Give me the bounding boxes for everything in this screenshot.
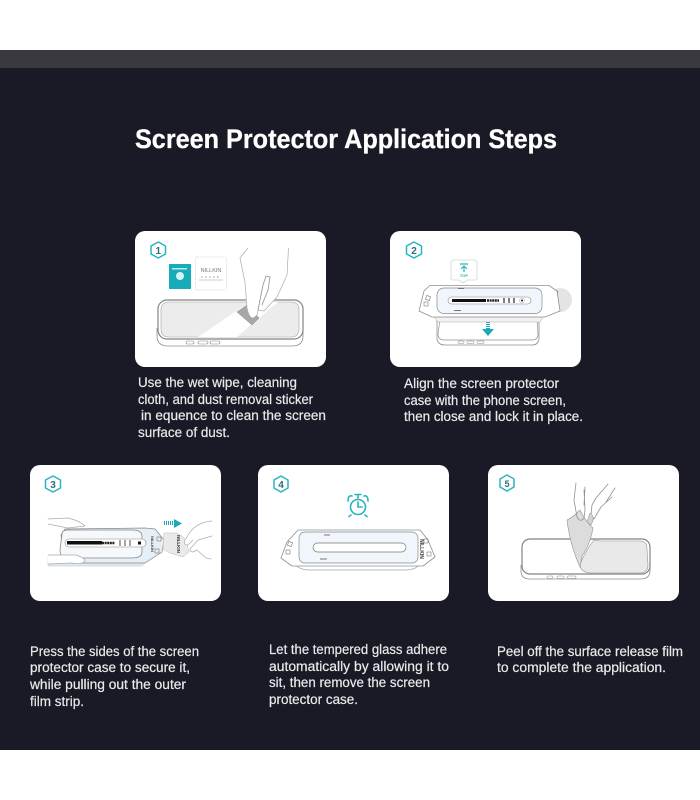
panel: step 4 <box>258 465 449 601</box>
illustration: case pressed while pulling film: NILLKIN <box>176 535 181 553</box>
text: step 2 instructions: then close and lock it in place. <box>404 409 583 424</box>
text: step 4 instructions: protector case. <box>269 692 358 707</box>
icon: top marker bubble: TOP <box>460 273 468 278</box>
text: step 3 instructions: while pulling out the outer <box>29 677 187 692</box>
illustration: peeling film off phone <box>521 483 650 579</box>
panel: step 2 <box>390 231 581 367</box>
icon: wet wipe packet <box>169 264 191 289</box>
icon: step 1 badge: 1 <box>156 246 162 257</box>
icon: step 1 badge <box>151 242 166 258</box>
icon: step 5 badge <box>500 475 514 491</box>
text: step 2 instructions <box>404 376 583 424</box>
panel: step 5 <box>488 465 679 601</box>
icon: alarm clock <box>348 494 368 516</box>
icon: cleaning cloth packet <box>196 257 226 290</box>
icon: top marker bubble <box>451 260 477 283</box>
arrow: pull direction <box>164 519 182 528</box>
text: step 2 instructions: Align the screen protector <box>404 376 559 391</box>
illustration: case pressed while pulling film: NILLKIN <box>150 536 155 552</box>
text: step 5 instructions: to complete the application. <box>497 660 666 675</box>
title: Screen Protector Application Steps <box>135 124 557 154</box>
text: step 1 instructions: in equence to clean the screen <box>141 408 326 423</box>
text: step 3 instructions: protector case to secure it, <box>30 660 190 675</box>
text: step 2 instructions: case with the phone screen, <box>404 393 566 408</box>
text: step 1 instructions: cloth, and dust removal sticker <box>138 392 313 407</box>
text: step 3 instructions: film strip. <box>30 694 84 709</box>
icon: step 3 badge <box>46 476 60 492</box>
text: step 4 instructions: Let the tempered glass adhere <box>269 642 447 657</box>
illustration: case pressed while pulling film <box>48 518 212 566</box>
panel: step 1 <box>135 231 326 367</box>
illustration: case left to sit on phone: NILLKIN <box>418 539 424 559</box>
icon: step 5 badge: 5 <box>504 479 510 489</box>
text: step 1 instructions <box>138 375 326 440</box>
icon: step 4 badge: 4 <box>278 480 284 491</box>
text: step 4 instructions: sit, then remove the screen <box>269 675 430 690</box>
icon: step 2 badge: 2 <box>411 246 417 257</box>
icon: step 2 badge <box>406 242 422 258</box>
text: step 1 instructions: surface of dust. <box>138 425 230 440</box>
illustration: case aligned over phone <box>419 286 572 345</box>
header band <box>0 50 700 68</box>
text: step 3 instructions <box>29 644 199 709</box>
panel: step 3 <box>30 465 221 601</box>
text: step 4 instructions: automatically by allowing it to <box>269 659 449 674</box>
icon: step 3 badge: 3 <box>50 480 56 491</box>
icon: cleaning cloth packet: NILLKIN <box>201 268 221 274</box>
text: step 4 instructions <box>269 642 449 707</box>
text: step 3 instructions: Press the sides of the screen <box>30 644 199 659</box>
illustration: case aligned over phone: NILLKIN <box>554 291 559 309</box>
illustration: case left to sit on phone <box>281 530 435 570</box>
icon: step 4 badge <box>274 476 288 492</box>
text: step 5 instructions: Peel off the surface release film <box>497 644 683 659</box>
arrow: press down <box>482 322 494 336</box>
text: step 5 instructions <box>497 644 683 675</box>
illustration: phone being wiped <box>157 248 303 346</box>
text: step 1 instructions: Use the wet wipe, cleaning <box>138 375 297 390</box>
